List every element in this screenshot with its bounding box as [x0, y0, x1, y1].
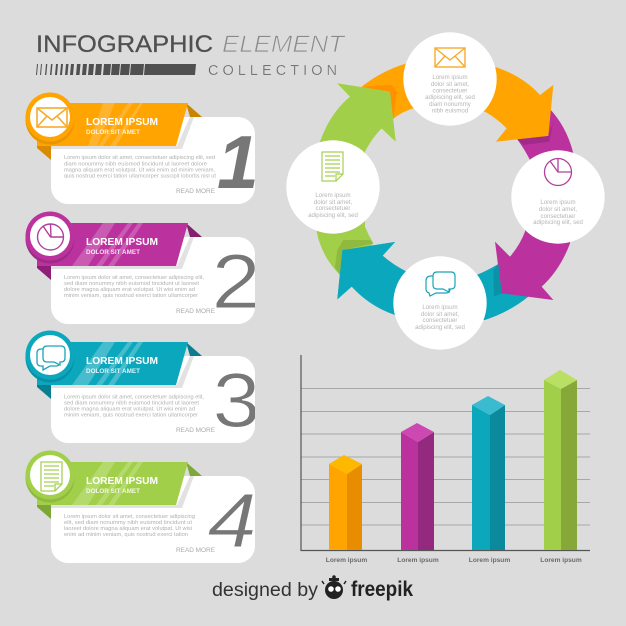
- panel: card 3 teal: LOREM IPSUM: [86, 356, 158, 367]
- footer: designed by freepik: freepik: [351, 578, 413, 601]
- teal head over green: [337, 242, 395, 299]
- panel: circle top: [403, 32, 497, 126]
- panel: card 3 teal: sed diam nonummy nibh euismod tincidunt ut laoreet: [64, 400, 200, 406]
- bar labels: Lorem ipsum: [397, 557, 439, 564]
- panel: card 3 teal: DOLOR SIT AMET: [86, 368, 140, 375]
- panel: card 1 orange: DOLOR SIT AMET: [86, 129, 140, 136]
- cycle arrows: [317, 63, 573, 320]
- icon: document: [41, 462, 62, 491]
- icon: pie chart: [544, 158, 572, 186]
- panel: card 2 purple: LOREM IPSUM: [86, 237, 158, 248]
- panel: circle left: Lorem ipsum: [315, 192, 351, 199]
- bar: green: [544, 370, 577, 550]
- panel: circle right: consectetuer: [541, 213, 575, 220]
- panel: card 4 green: [26, 450, 257, 564]
- panel: card 2 purple: READ MORE: [176, 308, 215, 315]
- panel: card 1 orange: quis nostrud exerci tation ullamcorper suscipit lobortis nisl ut: [64, 174, 217, 180]
- title: COLLECTION: [208, 63, 337, 79]
- axes: [301, 355, 590, 550]
- panel: card 4 green: Lorem ipsum dolor sit amet, consectetuer adipiscing: [64, 514, 195, 520]
- panel: circle left: consectetuer: [316, 205, 350, 212]
- title: ELEMENT: [222, 31, 347, 58]
- panel: card 2 purple: Lorem ipsum dolor sit amet, consectetuer adipiscing elit,: [64, 275, 205, 281]
- panel: circle left: adipiscing elit, sed: [308, 212, 358, 219]
- panel: circle bottom: consectetuer: [423, 317, 457, 324]
- icon: freepik mascot: [322, 575, 346, 599]
- arrow: green: [317, 83, 396, 275]
- panel: circle right: [511, 150, 605, 244]
- panel: card 4 green: LOREM IPSUM: [86, 476, 158, 487]
- panel: card 1 orange: [26, 92, 259, 204]
- icon: document: [322, 152, 343, 181]
- footer: designed by freepik: designed by: [212, 580, 319, 601]
- panel: card 2 purple: minim veniam, quis nostrud exerci tation ullamcorper: [64, 293, 198, 299]
- panel: circle left: dolor sit amet,: [314, 199, 352, 206]
- panel: circle top: consectetuer: [433, 88, 467, 94]
- panel: circle top: diam nonummy: [429, 101, 472, 108]
- bar labels: Lorem ipsum: [469, 557, 510, 564]
- number 3: 3: [212, 358, 260, 444]
- icon: envelope: [37, 108, 67, 127]
- number 1: 1: [217, 120, 259, 204]
- green head over orange: [337, 83, 396, 142]
- panel: card 4 green: laoreet dolore magna aliquam erat volutpat. Ut wisi: [64, 526, 192, 532]
- panel: circle right: dolor sit amet,: [539, 206, 577, 213]
- panel: circle left: [286, 140, 380, 234]
- panel: card 3 teal: minim veniam, quis nostrud exerci tation ullamcorper: [64, 412, 198, 418]
- ribbon: [37, 462, 188, 505]
- bar: teal: [472, 396, 505, 550]
- bar labels: [326, 557, 582, 564]
- bar labels: Lorem ipsum: [540, 557, 582, 564]
- panel: card 4 green: elit, sed diam nonummy nibh euismod tincidunt ut: [64, 520, 193, 526]
- panel: card 4 green: READ MORE: [176, 547, 215, 554]
- panel: card 3 teal: dolore magna aliquam erat volutpat. Ut wisi enim ad: [64, 406, 195, 412]
- panel: circle bottom: dolor sit amet,: [421, 311, 459, 318]
- bar: orange: [329, 455, 362, 550]
- panel: card 1 orange: LOREM IPSUM: [86, 117, 158, 128]
- panel: circle right: adipiscing elit, sed: [533, 219, 583, 226]
- panel: circle bottom: [393, 256, 487, 350]
- arrow overlaps: [362, 85, 397, 118]
- arrow: teal: [337, 242, 528, 320]
- bar labels: Lorem ipsum: [326, 557, 367, 564]
- panel: card 2 purple: dolore magna aliquam erat volutpat. Ut wisi enim ad: [64, 287, 195, 293]
- title: [36, 31, 347, 79]
- panel: card 3 teal: READ MORE: [176, 427, 215, 434]
- panel: card 3 teal: [26, 330, 260, 444]
- panel: circle top: adipiscing elit, sed: [425, 94, 475, 101]
- title stripe bar: [36, 64, 196, 75]
- ribbon: [37, 223, 188, 266]
- number 4: 4: [208, 477, 257, 564]
- number 2: 2: [212, 238, 261, 325]
- panel: circle top: dolor sit amet,: [431, 81, 469, 88]
- ribbon: [37, 342, 188, 385]
- panel: circle bottom: adipiscing elit, sed: [415, 324, 465, 331]
- icon: chat bubbles: [426, 272, 455, 296]
- panel: card 1 orange: magna aliquam erat volutpat. Ut wisi enim ad minim veniam,: [64, 168, 216, 174]
- bar chart: [301, 355, 590, 564]
- panel: circle bottom: Lorem ipsum: [422, 304, 458, 311]
- panel: circle right: Lorem ipsum: [540, 199, 576, 206]
- panel: card 2 purple: DOLOR SIT AMET: [86, 249, 140, 256]
- bar: purple: [401, 423, 434, 550]
- title: INFOGRAPHIC: [36, 31, 213, 58]
- arrow: purple: [495, 108, 573, 300]
- icon: envelope: [435, 48, 465, 67]
- arrow: orange: [362, 63, 553, 142]
- panel: card 1 orange: diam nonummy nibh euismod tincidunt ut laoreet dolore: [64, 162, 207, 168]
- panel: card 4 green: enim ad minim veniam, quis nostrud exerci tation: [64, 532, 188, 538]
- panel: card 3 teal: Lorem ipsum dolor sit amet, consectetuer adipiscing elit,: [64, 394, 205, 400]
- ribbon: [37, 103, 188, 146]
- panel: circle top: nibh euismod: [432, 108, 468, 114]
- panel: circle top: Lorem ipsum: [432, 74, 468, 81]
- panel: card 4 green: DOLOR SIT AMET: [86, 488, 140, 495]
- panel: card 2 purple: sed diam nonummy nibh euismod tincidunt ut laoreet: [64, 281, 200, 287]
- footer: designed by freepik: [212, 575, 413, 601]
- panel: card 1 orange: Lorem ipsum dolor sit amet, consectetuer adipiscing elit, sed: [64, 155, 215, 161]
- panel: card 1 orange: READ MORE: [176, 188, 215, 195]
- icon: chat bubbles: [37, 346, 65, 370]
- panel: card 2 purple: [26, 212, 261, 325]
- icon: pie chart: [38, 224, 64, 250]
